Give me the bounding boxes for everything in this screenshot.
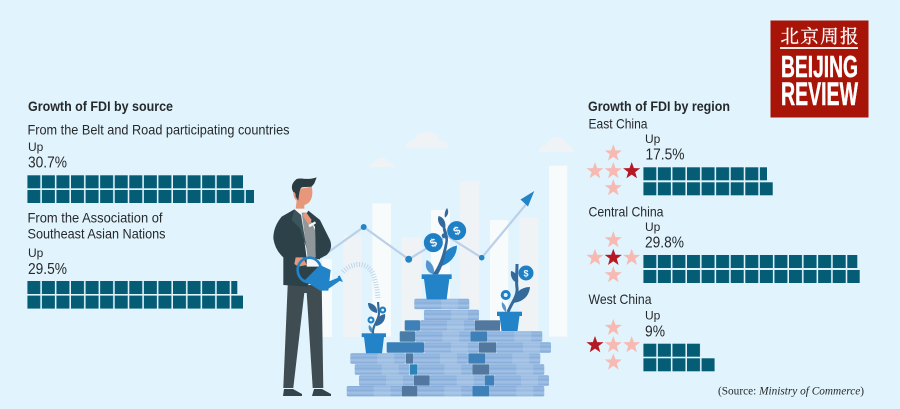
- illustration: water stream: [343, 264, 378, 298]
- panel: growth of FDI by source: [27, 98, 290, 309]
- heading: by source: Growth of FDI by source: [28, 98, 173, 114]
- heading: by region: Growth of FDI by region: [588, 98, 730, 114]
- illustration: businessman watering plants: [273, 177, 343, 396]
- value: 29.8%: 29.8%: [645, 235, 684, 252]
- jacket: [273, 209, 331, 287]
- illustration: coin stacks: [347, 299, 551, 396]
- trousers: [283, 285, 323, 388]
- bar: ASEAN squares: [27, 281, 243, 309]
- watering can: [294, 257, 343, 291]
- chart: trend line with arrow: [320, 191, 534, 263]
- value: 9%: 9%: [645, 324, 665, 341]
- label: ASEAN second line: Southeast Asian Nations: [28, 226, 166, 242]
- value: 29.5%: 29.5%: [28, 261, 67, 278]
- man's upper body: [273, 177, 331, 287]
- label: East China: East China: [588, 116, 648, 132]
- lower hand and cuff: [294, 257, 307, 267]
- label: Up: Up: [28, 246, 44, 260]
- label: Up: Up: [645, 132, 661, 146]
- bar: Central China squares: [643, 255, 860, 283]
- tie: [302, 213, 316, 258]
- bar: East China squares: [643, 167, 773, 195]
- label: Up: Up: [645, 308, 661, 322]
- illustration: background bars and clouds: [322, 132, 573, 337]
- panel: growth of FDI by region: [586, 98, 860, 371]
- illustration: small plant: [362, 302, 386, 353]
- label: Belt and Road: From the Belt and Road participating countries: [28, 122, 290, 138]
- raised hand and cuff: [302, 213, 312, 225]
- label: ASEAN: From the Association of: [28, 210, 163, 226]
- label: Central China: Central China: [588, 204, 664, 220]
- label: Up: Up: [645, 220, 661, 234]
- logo: Beijing Review: [770, 20, 868, 118]
- label: Up: Up: [28, 140, 44, 154]
- shoes: [283, 389, 331, 396]
- hair: [292, 177, 317, 201]
- illustration: right plant with coins: $: [523, 268, 529, 278]
- value: 17.5%: 17.5%: [646, 146, 685, 164]
- neck and face: [293, 187, 312, 209]
- source note: (Source: Ministry of Commerce): [718, 386, 864, 398]
- icon: West China stars: [586, 319, 640, 370]
- illustration: middle plant with coins: [422, 208, 466, 299]
- illustration: right plant with coins: [497, 264, 534, 331]
- bar: West China squares: [643, 344, 715, 371]
- icon: East China stars: [586, 144, 640, 195]
- label: West China: West China: [588, 291, 652, 307]
- lapel: [292, 209, 307, 248]
- icon: Central China stars: [586, 231, 640, 282]
- shirt: [294, 208, 317, 259]
- value: 30.7%: 30.7%: [28, 154, 67, 172]
- bar: Belt and Road squares: [27, 175, 254, 203]
- logo: Beijing Review: 北京周报: [780, 23, 858, 49]
